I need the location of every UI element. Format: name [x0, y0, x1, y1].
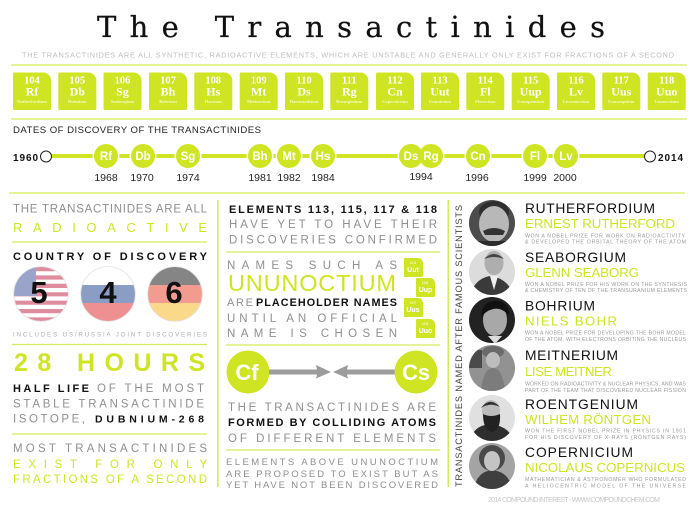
- tile: 109 Mt: 109: [251, 76, 267, 86]
- title: The Transactinides: [97, 10, 605, 44]
- tile: 107 Bh: [149, 72, 187, 110]
- portrait: Bohr: [468, 296, 516, 344]
- note: joint discoveries: INCLUDES US/RUSSIA JOINT DISCOVERIES: [13, 332, 207, 339]
- tile: 113 Uut: 113: [432, 76, 448, 86]
- text: unconfirmed elements: HAVE YET TO HAVE THEIR: [229, 219, 437, 231]
- icon: USA flag with count 5: [13, 266, 69, 322]
- marker: Mt 1982: [276, 142, 302, 184]
- atom: Cs: [394, 350, 438, 394]
- tile: 117 Uus: [602, 72, 640, 110]
- atom: Cf: Cf: [235, 360, 259, 385]
- tile: 106 Sg: Sg: [116, 84, 129, 98]
- tile: 106 Sg: 106: [115, 76, 130, 86]
- heading: country of discovery: COUNTRY OF DISCOVERY: [13, 251, 208, 263]
- entry: Bohrium: BOHRIUM: [525, 298, 595, 314]
- tile: 118 Uuo: [648, 72, 686, 110]
- entry: Meitnerium: [525, 348, 687, 394]
- timeline end: 2014: [644, 151, 683, 164]
- text: placeholder names: [227, 260, 398, 340]
- entry: Seaborgium: [525, 250, 688, 294]
- tile: 116 Lv: Livermorium: [563, 99, 589, 104]
- entry: Seaborgium: WON A NOBEL PRIZE FOR HIS WORK ON THE SYNTHESIS: [525, 282, 688, 288]
- text: half life: ISOTOPE,: [13, 414, 85, 426]
- text: formed by colliding atoms: OF DIFFERENT ELEMENTS: [228, 433, 436, 445]
- tile: 104 Rf: Rf: [26, 84, 39, 98]
- small tile: Uuo: 118: [422, 321, 429, 326]
- small tile: Uut: [404, 258, 423, 277]
- marker: Db 1970: Db: [135, 151, 151, 163]
- panel: element tiles 104 to 118: [13, 72, 686, 110]
- tile: 107 Bh: 107: [160, 76, 176, 86]
- marker: Bh 1981: [246, 142, 274, 184]
- tile: 114 Fl: [466, 72, 504, 110]
- text: all radioactive: RADIOACTIVE: [13, 220, 207, 235]
- tile: 116 Lv: [557, 72, 595, 110]
- tile: 115 Uup: Ununpentium: [517, 99, 545, 104]
- icon: Russia flag with count 4: [80, 266, 136, 323]
- entry: Rutherfordium: RUTHERFORDIUM: [525, 201, 655, 216]
- text: unconfirmed elements: [229, 204, 437, 246]
- entry: Seaborgium: SEABORGIUM: [525, 250, 626, 265]
- tile: 108 Hs: Hs: [206, 84, 221, 98]
- marker: Db 1970: [130, 142, 156, 184]
- text: fractions of a second: FRACTIONS OF A SECOND: [13, 474, 207, 486]
- tile: 113 Uut: [421, 72, 459, 110]
- tile: 113 Uut: Ununtrium: [429, 99, 451, 104]
- tile: 112 Cn: Copernicium: [382, 99, 408, 104]
- entry: Bohrium: [525, 298, 687, 343]
- timeline start: 1960: [13, 151, 52, 164]
- marker: Bh 1981: 1981: [248, 172, 272, 184]
- timeline end: 2014: 2014: [658, 153, 683, 164]
- tile: 110 Ds: 110: [296, 76, 312, 86]
- tile: 114 Fl: Flerovium: [475, 99, 496, 104]
- tile: 115 Uup: [512, 72, 550, 110]
- small tile: Uup: [416, 278, 435, 297]
- subtitle: THE TRANSACTINIDES ARE ALL SYNTHETIC, RADIOACTIVE ELEMENTS, WHICH ARE UNSTABLE AND GENERALLY ONLY EXIST FOR FRACTIONS OF A SECOND: [22, 50, 674, 60]
- vertical heading: named after scientists: TRANSACTINIDES NAMED AFTER FAMOUS SCIENTISTS: [454, 205, 464, 487]
- icon: Russia flag with count 4: 4: [99, 275, 117, 310]
- icon: Germany flag with count 6: 6: [165, 275, 183, 310]
- marker: Lv 2000: 2000: [553, 172, 577, 184]
- text: elements above ununoctium: ELEMENTS ABOVE UNUNOCTIUM: [226, 457, 438, 468]
- arrow: right: [269, 365, 331, 378]
- text: placeholder names: NAME IS CHOSEN: [227, 328, 397, 340]
- text: fractions of a second: EXIST FOR ONLY: [13, 459, 207, 471]
- portrait: Seaborg: [468, 248, 516, 296]
- tile: 104 Rf: [13, 72, 51, 110]
- tile: 105 Db: Dubnium: [68, 99, 87, 104]
- marker: Mt 1982: Mt: [282, 151, 296, 163]
- tile: 116 Lv: Lv: [569, 84, 583, 98]
- entry: Copernicium: MATHEMATICIAN & ASTRONOMER WHO FORMULATED: [525, 477, 686, 483]
- marker: Fl 1999: [522, 142, 548, 184]
- tile: 110 Ds: Ds: [297, 84, 311, 98]
- tile: 109 Mt: [240, 72, 278, 110]
- tile: 108 Hs: [194, 72, 232, 110]
- entry: Copernicium: NICOLAUS COPERNICUS: [525, 460, 685, 475]
- tile: 114 Fl: 114: [478, 76, 494, 86]
- entry: Roentgenium: WILHEM RÖNTGEN: [525, 412, 651, 427]
- text: formed by colliding atoms: [228, 402, 436, 445]
- tile: 104 Rf: 104: [24, 76, 41, 86]
- marker: Ds and Rg 1994: Ds: [404, 151, 418, 163]
- marker: Sg 1974: 1974: [176, 172, 200, 184]
- marker: Sg 1974: [174, 142, 202, 184]
- diagram: colliding atoms: [226, 350, 438, 394]
- marker: Lv 2000: [552, 142, 580, 184]
- tile: 111 Rg: [330, 72, 368, 110]
- small tile: Uuo: [416, 319, 435, 338]
- tile: 118 Uuo: 118: [659, 76, 674, 86]
- tile: 114 Fl: Fl: [480, 84, 491, 98]
- tile: 110 Ds: [285, 72, 323, 110]
- portrait: Meitner: [468, 344, 516, 392]
- atom: Cf: [226, 350, 270, 394]
- tile: 115 Uup: Uup: [520, 84, 542, 98]
- tile: 112 Cn: 112: [387, 76, 403, 86]
- entry: Rutherfordium: ERNEST RUTHERFORD: [525, 216, 675, 231]
- entry: Meitnerium: MEITNERIUM: [525, 348, 618, 363]
- text: unconfirmed elements: ELEMENTS 113, 115, 117 & 118: [229, 204, 437, 216]
- marker: Mt 1982: 1982: [277, 172, 301, 184]
- marker: Ds and Rg 1994: Rg: [423, 151, 439, 163]
- entry: Seaborgium: & CHEMISTRY OF TEN OF THE TRANSURANIUM ELEMENTS: [525, 288, 688, 294]
- marker: Fl 1999: 1999: [523, 172, 547, 184]
- icon: Germany flag with count 6: [147, 266, 203, 323]
- text: fractions of a second: MOST TRANSACTINIDES: [13, 443, 207, 455]
- portrait: Rutherford: [469, 200, 515, 246]
- small tile: Uus: 117: [410, 300, 417, 305]
- tile: 107 Bh: Bohrium: [159, 99, 177, 104]
- marker: Rf 1968: [92, 142, 120, 184]
- entry: Copernicium: COPERNICIUM: [525, 445, 633, 460]
- timeline start: 1960: 1960: [13, 153, 38, 164]
- entry: Meitnerium: WORKED ON RADIOACTIVITY & NUCLEAR PHYSICS, AND WAS: [525, 382, 687, 388]
- entry: Bohrium: NIELS BOHR: [525, 314, 617, 328]
- entry: Seaborgium: GLENN SEABORG: [525, 265, 639, 280]
- text: placeholder names: UNTIL AN OFFICIAL: [227, 313, 398, 325]
- small tile: Uus: Uus: [406, 307, 420, 314]
- footer credit: 2014 COMPOUND INTEREST - WWW.COMPOUNDCHEM.COM: [488, 497, 660, 504]
- marker: Fl 1999: Fl: [530, 151, 540, 163]
- entry: Roentgenium: [525, 397, 686, 441]
- portrait: Röntgen: [468, 394, 516, 442]
- icon: USA flag with count 5: 5: [30, 275, 48, 310]
- text: half life: DUBNIUM-268: [95, 414, 204, 426]
- entry: Rutherfordium: WON A NOBEL PRIZE FOR WORK ON RADIOACTIVITY: [525, 234, 686, 240]
- tile: 107 Bh: Bh: [161, 84, 176, 98]
- tile: 108 Hs: 108: [205, 76, 221, 86]
- atom: Cs: Cs: [402, 360, 430, 385]
- marker: Db 1970: 1970: [130, 172, 154, 184]
- timeline: [13, 142, 683, 184]
- tile: 108 Hs: Hassium: [205, 99, 222, 104]
- text: elements above ununoctium: YET HAVE NOT BEEN DISCOVERED: [226, 480, 438, 491]
- tile: 106 Sg: Seaborgium: [111, 99, 135, 104]
- tile: 113 Uut: Uut: [430, 84, 450, 98]
- tile: 109 Mt: Mt: [251, 84, 266, 98]
- marker: Rf 1968: Rf: [100, 151, 112, 163]
- text: all radioactive: [13, 204, 208, 235]
- small tile: Uut: Uut: [407, 267, 419, 274]
- text: half life: HALF LIFE: [13, 383, 89, 395]
- tile: 115 Uup: 115: [523, 76, 538, 86]
- portrait: Copernicus: [468, 442, 516, 490]
- tile: 109 Mt: Meitnerium: [247, 99, 271, 104]
- arrow: left: [333, 365, 395, 378]
- panel: left column: [12, 204, 208, 486]
- entry: Bohrium: OF THE ATOM, WITH ELECTRONS ORBITING THE NUCLEUS: [525, 337, 687, 343]
- tile: 112 Cn: Cn: [387, 84, 403, 98]
- tile: 111 Rg: 111: [342, 76, 357, 86]
- tile: 118 Uuo: Ununoctium: [654, 99, 679, 104]
- text: all radioactive: THE TRANSACTINIDES ARE ALL: [13, 204, 208, 216]
- marker: Ds and Rg 1994: 1994: [409, 171, 433, 183]
- tile: 104 Rf: Rutherfordium: [17, 99, 47, 104]
- stat: 28 hours: 28 HOURS: [14, 349, 205, 377]
- marker: Bh 1981: Bh: [252, 151, 268, 163]
- tile: 105 Db: 105: [69, 76, 85, 86]
- marker: Lv 2000: Lv: [559, 151, 573, 163]
- text: half life: [13, 383, 204, 426]
- marker: Hs 1984: 1984: [311, 172, 335, 184]
- small tile: Uus: [404, 298, 423, 317]
- tile: 110 Ds: Darmstadtium: [290, 99, 319, 104]
- text: fractions of a second: [13, 443, 207, 486]
- entry: Copernicium: [525, 445, 687, 490]
- entry: Rutherfordium: [525, 201, 686, 246]
- marker: Cn 1996: Cn: [470, 151, 486, 163]
- entry: Roentgenium: FOR HIS DISCOVERY OF X-RAYS (RÖNTGEN RAYS): [525, 434, 686, 441]
- panel: scientists: [468, 199, 688, 490]
- marker: Hs 1984: [310, 142, 336, 184]
- text: placeholder names: PLACEHOLDER NAMES: [256, 297, 397, 309]
- tile: 111 Rg: Rg: [342, 84, 357, 98]
- entry: Roentgenium: WON THE FIRST NOBEL PRIZE IN PHYSICS IN 1901: [525, 428, 686, 434]
- entry: Copernicium: A HELIOCENTRIC MODEL OF THE UNIVERSE: [525, 484, 687, 490]
- text: half life: STABLE TRANSACTINIDE: [13, 398, 204, 410]
- text: unconfirmed elements: DISCOVERIES CONFIRMED: [229, 234, 437, 246]
- tile: 116 Lv: 116: [568, 76, 584, 86]
- marker: Sg 1974: Sg: [181, 151, 195, 163]
- small tile: Uut: 113: [410, 260, 417, 265]
- tile: 118 Uuo: Uuo: [656, 84, 677, 98]
- small tile: Uuo: Uuo: [419, 328, 432, 335]
- text: formed by colliding atoms: THE TRANSACTINIDES ARE: [228, 402, 436, 414]
- text: formed by colliding atoms: FORMED BY COLLIDING ATOMS: [228, 417, 436, 429]
- marker: Cn 1996: 1996: [465, 172, 489, 184]
- tile: 112 Cn: [376, 72, 414, 110]
- text: elements above ununoctium: [226, 457, 438, 491]
- marker: Rf 1968: 1968: [94, 172, 118, 184]
- entry: Bohrium: WON A NOBEL PRIZE FOR DEVELOPING THE BOHR MODEL: [525, 330, 686, 336]
- marker: Cn 1996: [464, 142, 492, 184]
- text: placeholder names: ARE: [227, 297, 253, 309]
- tile: 117 Uus: Ununseptium: [608, 99, 635, 104]
- tile: 105 Db: Db: [70, 84, 85, 98]
- text: placeholder names: UNUNOCTIUM: [228, 270, 396, 296]
- entry: Meitnerium: PART OF THE TEAM THAT DISCOVERED NUCLEAR FISSION: [525, 388, 686, 394]
- text: elements above ununoctium: ARE PROPOSED TO EXIST BUT AS: [226, 469, 438, 480]
- tile: 111 Rg: Roentgenium: [336, 99, 363, 104]
- tile: 105 Db: [58, 72, 96, 110]
- tile: 117 Uus: 117: [614, 76, 629, 86]
- text: placeholder names: NAMES SUCH AS: [227, 260, 397, 272]
- entry: Meitnerium: LISE MEITNER: [525, 364, 612, 379]
- marker: Hs 1984: Hs: [316, 151, 330, 163]
- marker: Ds and Rg 1994: [398, 142, 444, 183]
- text: half life: OF THE MOST: [97, 383, 204, 395]
- small tile: Uup: 115: [422, 280, 429, 285]
- tile: 106 Sg: [104, 72, 142, 110]
- entry: Roentgenium: ROENTGENIUM: [525, 397, 638, 412]
- entry: Rutherfordium: & DEVELOPED THE ORBITAL THEORY OF THE ATOM: [525, 240, 686, 246]
- heading: dates of discovery: DATES OF DISCOVERY OF THE TRANSACTINIDES: [13, 125, 261, 136]
- small tile: Uup: Uup: [419, 287, 432, 294]
- tile: 117 Uus: Uus: [611, 84, 632, 98]
- panel: middle column: [226, 204, 440, 491]
